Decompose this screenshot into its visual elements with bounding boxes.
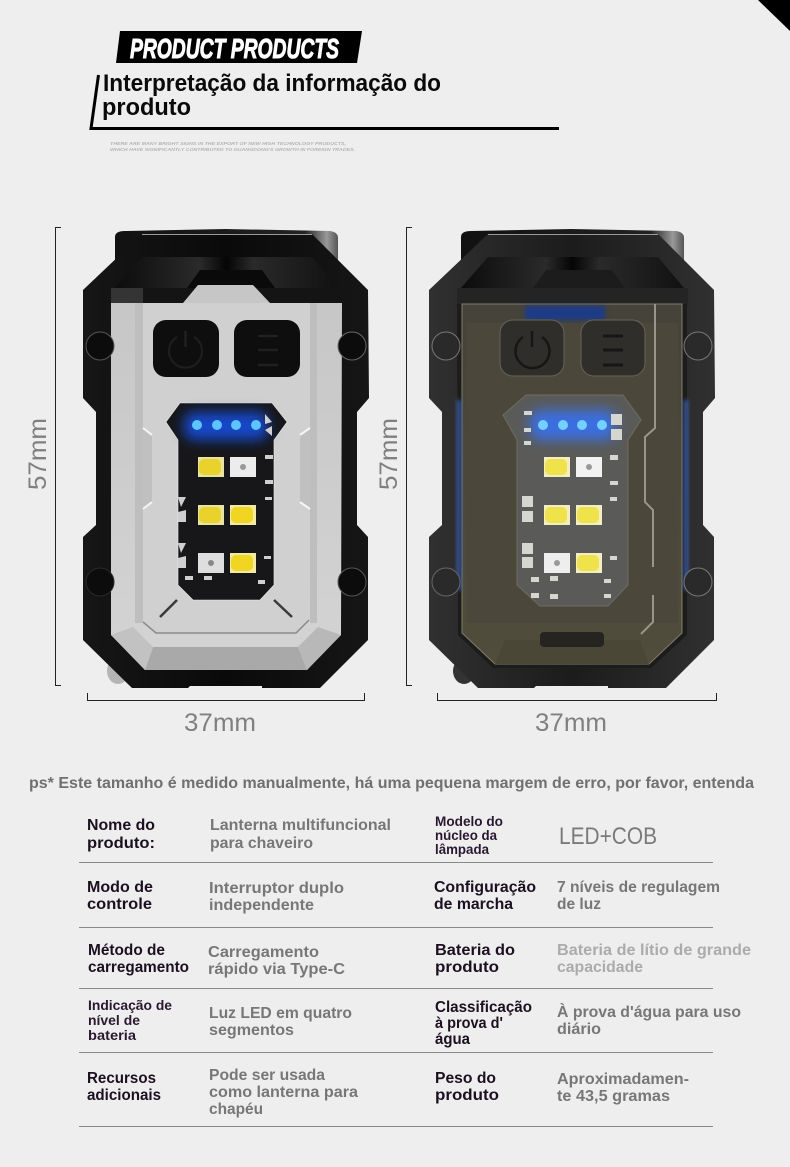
row: battery indication: à prova d' xyxy=(435,1015,503,1032)
inner tab shadow xyxy=(533,270,625,288)
row: battery indication: segmentos xyxy=(209,1022,294,1039)
row: extra features: produto xyxy=(435,1087,499,1104)
row: extra features: chapéu xyxy=(209,1101,263,1118)
row: charging method: Método de xyxy=(88,942,165,959)
row: charging method: rápido via Type-C xyxy=(208,961,345,978)
side components xyxy=(178,414,273,584)
screws xyxy=(86,332,366,596)
blue glow xyxy=(184,412,268,440)
inner light line xyxy=(641,304,655,634)
title: Interpretação da informação do xyxy=(103,70,441,97)
white and yellow LED chips xyxy=(198,457,256,573)
panel notches xyxy=(143,428,310,509)
row: battery indication: diário xyxy=(557,1021,601,1038)
title rule xyxy=(91,75,559,128)
icon: power button xyxy=(153,320,219,377)
dimension: right height: 57mm xyxy=(375,418,403,490)
row: control mode: de marcha xyxy=(434,896,513,913)
row: battery indication: bateria xyxy=(88,1028,137,1043)
slits xyxy=(160,600,292,617)
dimension: right width: 37mm xyxy=(535,709,607,737)
row: charging method: carregamento xyxy=(88,959,189,976)
outer frame xyxy=(429,234,715,688)
panel: silver flashlight xyxy=(83,229,369,688)
window band xyxy=(457,288,688,304)
row: battery indication: Indicação de xyxy=(88,998,173,1013)
slot xyxy=(540,632,604,647)
icon: mode button xyxy=(581,320,645,376)
row: control mode: Configuração xyxy=(434,879,536,896)
side components xyxy=(522,411,622,599)
row: extra features: como lanterna para xyxy=(209,1084,358,1101)
panel: transparent flashlight xyxy=(429,229,715,688)
title: produto xyxy=(102,94,191,121)
white and yellow LED chips xyxy=(544,457,602,573)
icon: power button xyxy=(500,320,564,376)
dimension: right width xyxy=(438,693,716,737)
row: battery indication: água xyxy=(435,1031,470,1048)
plate lower bevel xyxy=(495,640,649,664)
front window xyxy=(461,257,684,288)
title xyxy=(102,70,441,121)
row: battery indication: nível de xyxy=(88,1013,140,1028)
row: product name: LED+COB xyxy=(559,823,657,850)
row: extra features xyxy=(87,1067,689,1118)
lower bevels xyxy=(145,647,307,670)
dark side strips xyxy=(457,304,687,668)
row: product name: lâmpada xyxy=(435,842,489,857)
row: product name xyxy=(87,814,657,857)
row: product name: núcleo da xyxy=(435,828,497,843)
row: charging method: produto xyxy=(435,959,499,976)
silver plate xyxy=(111,285,342,670)
row: extra features: te 43,5 gramas xyxy=(557,1088,670,1105)
corner triangle xyxy=(758,0,790,31)
rear cylinder xyxy=(115,229,338,270)
row: charging method xyxy=(88,942,751,978)
back clip xyxy=(453,658,475,684)
battery indicator LEDs xyxy=(538,420,607,430)
row: battery indication xyxy=(88,998,741,1048)
LED board xyxy=(503,395,641,606)
row: extra features: adicionais xyxy=(87,1087,161,1104)
battery indicator LEDs xyxy=(192,420,261,430)
row: battery indication: À prova d'água para uso xyxy=(557,1004,741,1021)
olive transparent plate xyxy=(462,304,682,664)
top highlight xyxy=(488,234,658,236)
row: extra features: Recursos xyxy=(87,1070,156,1087)
row: extra features: Peso do xyxy=(435,1070,496,1087)
row: battery indication: Luz LED em quatro xyxy=(209,1005,352,1022)
dimension: right height xyxy=(375,228,412,686)
small caption: WHICH HAVE SIGNIFICANTLY CONTRIBUTED TO GUANGDONG'S GROWTH IN FOREIGN TRADES. xyxy=(110,147,355,152)
top highlight xyxy=(142,234,312,236)
dimension: left height xyxy=(24,228,61,686)
screws xyxy=(432,332,712,596)
outer frame xyxy=(83,234,369,688)
badge: product products xyxy=(116,31,362,64)
row: extra features: Aproximadamen- xyxy=(557,1071,689,1088)
row: control mode: 7 níveis de regulagem xyxy=(557,879,720,896)
specification table xyxy=(79,814,751,1126)
row: product name: para chaveiro xyxy=(210,835,313,852)
row: charging method: Bateria do xyxy=(435,942,515,959)
badge: product products: PRODUCT PRODUCTS xyxy=(130,33,339,64)
row: product name: Lanterna multifuncional xyxy=(210,817,391,834)
row: product name: Nome do xyxy=(87,817,155,834)
row: control mode: Modo de xyxy=(87,879,153,896)
dimension: left width xyxy=(88,693,364,737)
row: control mode: controle xyxy=(87,896,152,913)
inner tab shadow xyxy=(187,270,275,288)
front window xyxy=(115,257,338,288)
row: control mode: Interruptor duplo xyxy=(209,880,344,897)
small caption: THERE ARE MANY BRIGHT SIGNS IN THE EXPORT OF NEW HIGH TECHNOLOGY PRODUCTS, xyxy=(110,141,346,146)
row: control mode: independente xyxy=(209,897,314,914)
plate inner rectangle xyxy=(467,323,678,623)
side blue glow xyxy=(457,400,461,590)
row: charging method: capacidade xyxy=(557,959,643,976)
inner panel xyxy=(143,303,310,633)
blue reflection xyxy=(525,306,605,320)
LED screen xyxy=(166,403,287,600)
row: control mode xyxy=(87,879,720,914)
row: control mode: de luz xyxy=(557,896,601,913)
panel lower edge xyxy=(143,620,309,633)
row: product name: produto: xyxy=(87,835,155,852)
dimension: left height: 57mm xyxy=(24,418,52,490)
row: product name: Modelo do xyxy=(435,814,503,829)
channel shading xyxy=(143,428,152,509)
side shading xyxy=(135,303,143,623)
measurement note: ps* Este tamanho é medido manualmente, há uma pequena margem de erro, por favor, entenda xyxy=(29,775,754,792)
row: charging method: Bateria de lítio de grande xyxy=(557,942,751,959)
row: battery indication: Classificação xyxy=(435,999,532,1016)
small caption xyxy=(110,141,355,152)
header xyxy=(91,31,559,152)
dimension: left width: 37mm xyxy=(184,709,256,737)
row: extra features: Pode ser usada xyxy=(209,1067,325,1084)
row: charging method: Carregamento xyxy=(208,944,319,961)
icon: mode button xyxy=(234,320,300,377)
window band xyxy=(111,288,342,304)
blue glow xyxy=(530,410,616,440)
back clip xyxy=(107,658,129,684)
rear cylinder xyxy=(461,229,684,270)
